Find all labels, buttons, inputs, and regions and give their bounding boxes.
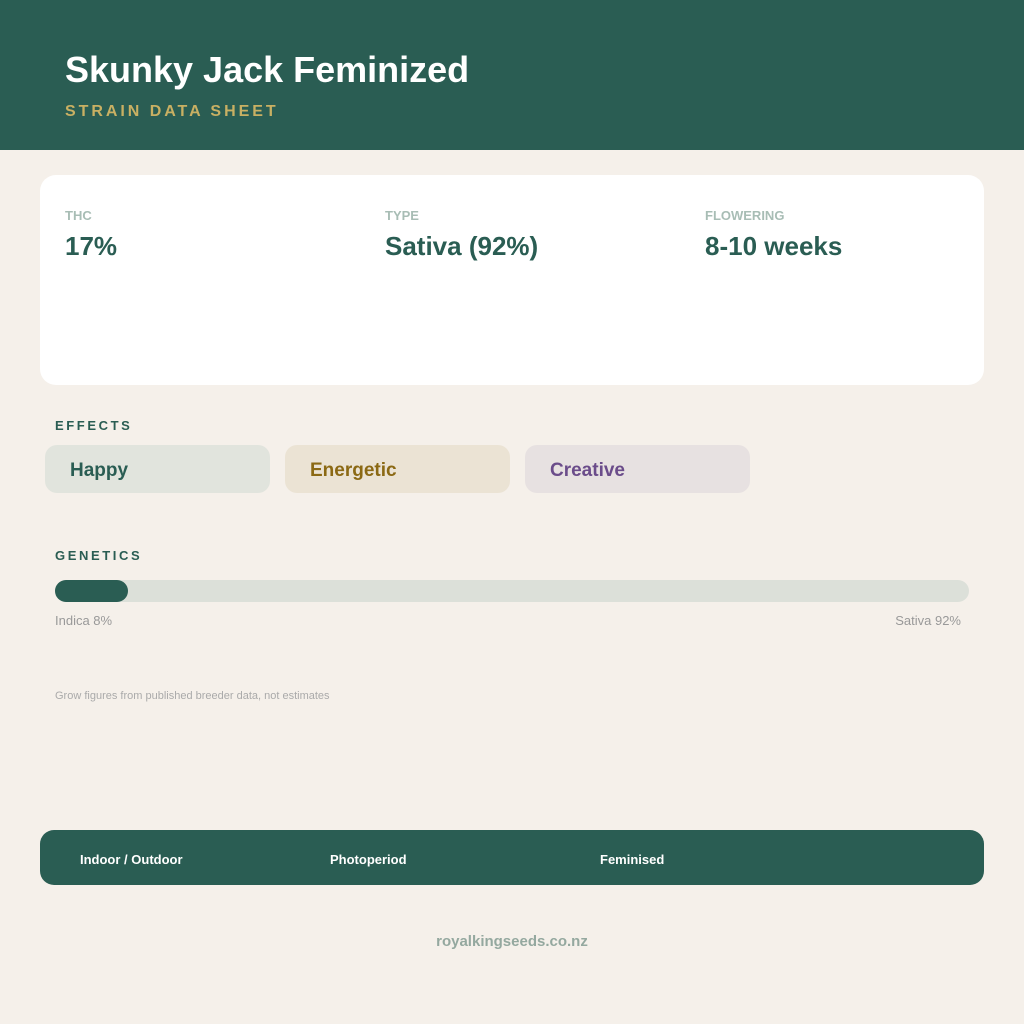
attribute: feminised: Feminised <box>600 852 664 867</box>
stat value: type: Sativa (92%) <box>385 231 538 261</box>
panel: key stats <box>40 175 984 385</box>
attribute: photoperiod: Photoperiod <box>330 852 407 867</box>
genetics bar <box>55 580 969 602</box>
subtitle: STRAIN DATA SHEET <box>65 103 279 120</box>
source note: Grow figures from published breeder data, not estimates <box>55 690 330 702</box>
stat label: THC: THC <box>65 208 92 223</box>
header band <box>0 0 1024 150</box>
effect pill: energetic <box>285 445 510 493</box>
heading: genetics: GENETICS <box>55 548 142 563</box>
stat label: flowering: FLOWERING <box>705 208 784 223</box>
effect pill: energetic: Energetic <box>310 460 397 481</box>
attribute: indoor / outdoor: Indoor / Outdoor <box>80 852 183 867</box>
effect pill: creative <box>525 445 750 493</box>
website: royalkingseeds.co.nz <box>436 933 588 950</box>
footer attributes bar <box>40 830 984 885</box>
indica bar fill <box>55 580 128 602</box>
label: indica share: Indica 8% <box>55 613 112 628</box>
label: sativa share: Sativa 92% <box>895 613 961 628</box>
heading: effects: EFFECTS <box>55 418 132 433</box>
stat value: flowering: 8-10 weeks <box>705 231 842 261</box>
effect pill: happy <box>45 445 270 493</box>
effect pill: creative: Creative <box>550 460 625 481</box>
stat value: THC: 17% <box>65 231 117 261</box>
effect pill: happy: Happy <box>70 460 128 481</box>
stat label: type: TYPE <box>385 208 419 223</box>
title: Skunky Jack Feminized <box>65 49 469 90</box>
